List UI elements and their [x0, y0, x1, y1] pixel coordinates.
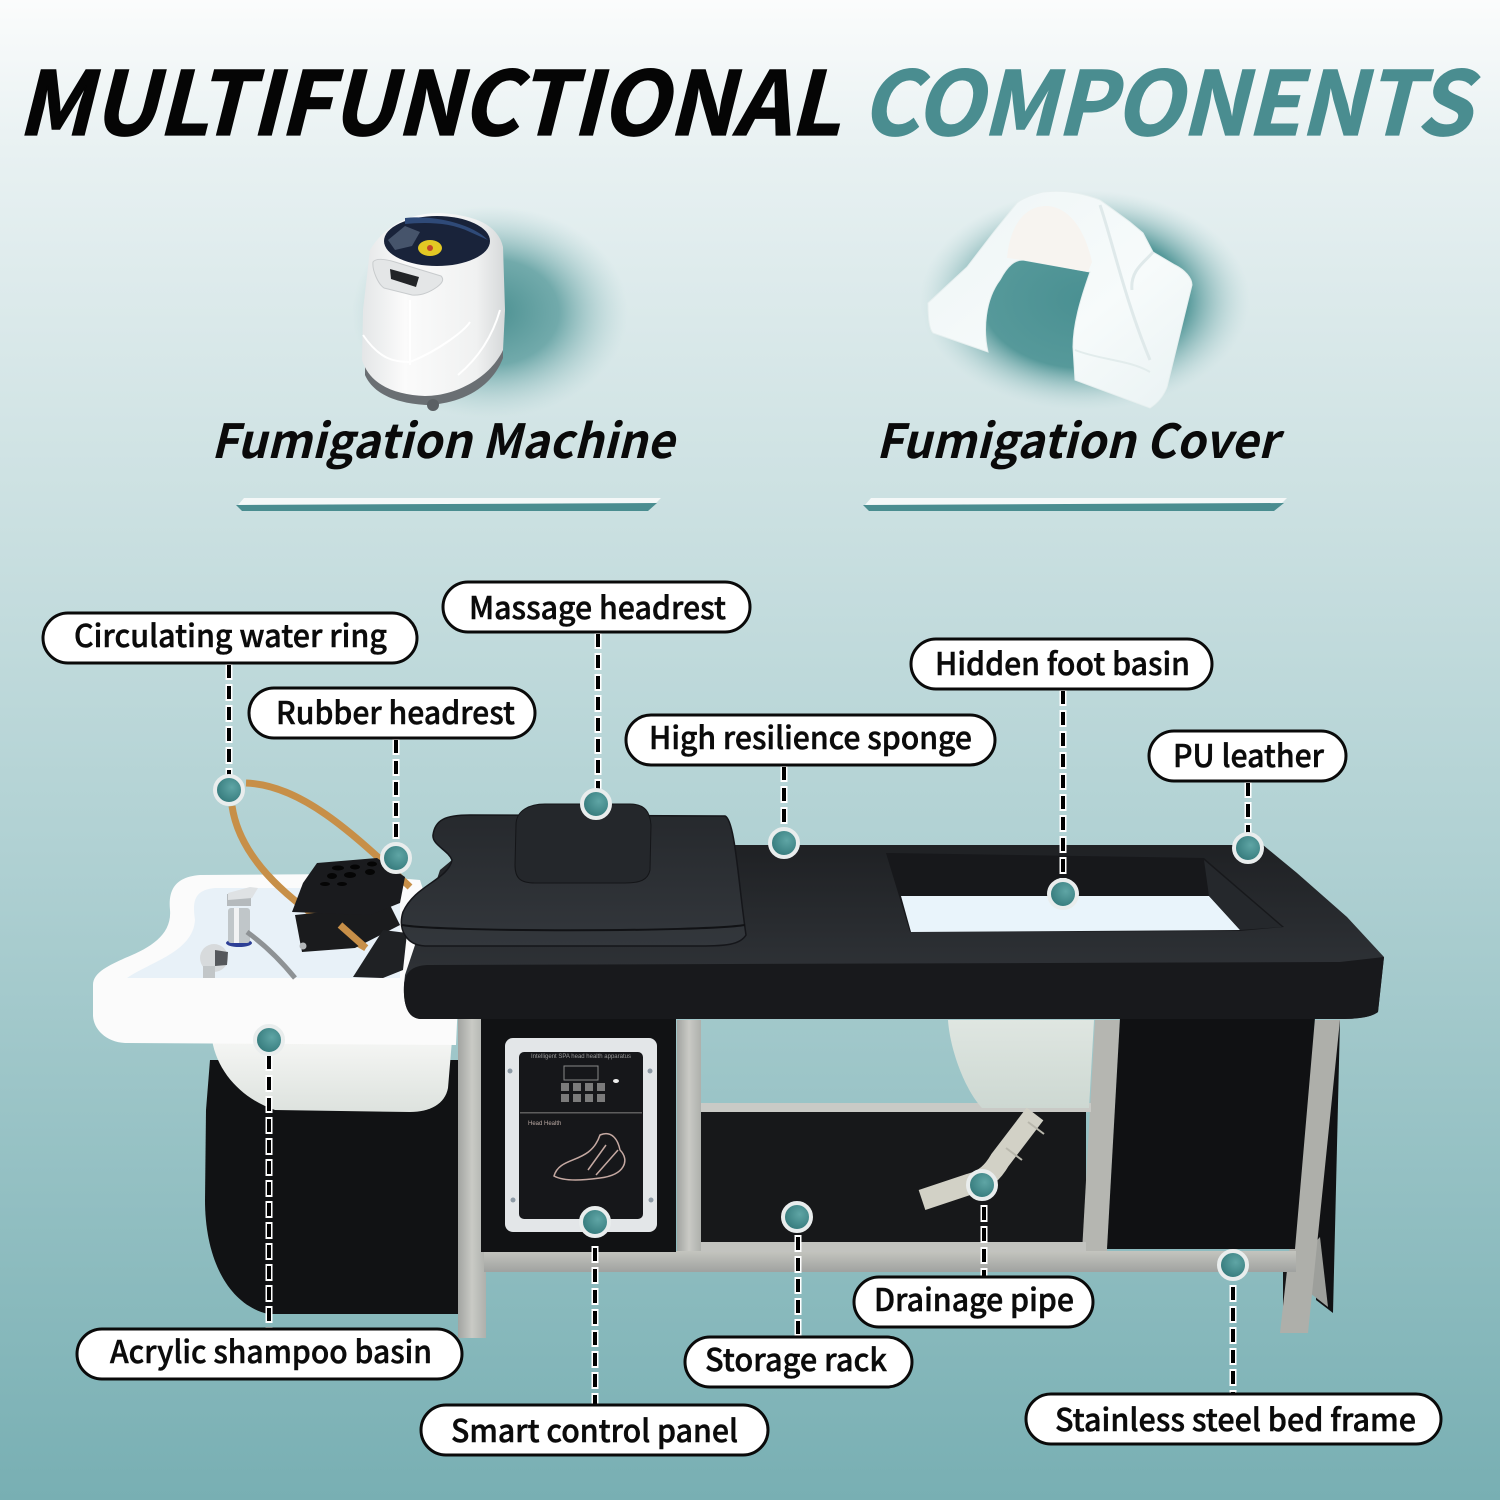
control panel — [505, 1038, 657, 1232]
callout: PU leather — [1149, 731, 1346, 862]
callout: rubber headrest — [249, 688, 535, 872]
underline: fumigation cover — [863, 498, 1287, 511]
control panel: Intelligent SPA head health apparatus — [531, 1054, 631, 1060]
acrylic basin bowl — [212, 1040, 452, 1112]
water ring — [232, 783, 410, 948]
heading: fumigation cover: Fumigation Cover — [876, 403, 1285, 472]
callout: acrylic shampoo basin — [77, 1026, 462, 1379]
icon: fumigation cover — [928, 191, 1192, 408]
callout: circulating water ring — [43, 611, 417, 804]
callout: massage headrest: Massage headrest — [469, 583, 726, 628]
callout: drainage pipe — [854, 1171, 1093, 1327]
panel: fumigation cover — [863, 190, 1287, 511]
callout: hidden foot basin: Hidden foot basin — [935, 639, 1190, 684]
panel: fumigation machine — [211, 206, 678, 511]
massage headrest cushion — [401, 804, 746, 946]
main mattress — [404, 845, 1384, 1019]
icon: steam machine — [362, 213, 505, 411]
acrylic basin top — [93, 874, 458, 1045]
title — [17, 34, 1480, 161]
callout: high resilience sponge: High resilience sponge — [649, 713, 972, 758]
callout: massage headrest — [443, 582, 750, 818]
callout: hidden foot basin — [911, 639, 1212, 908]
foot basin bowl — [948, 1020, 1094, 1108]
callout: smart control panel — [421, 1208, 768, 1455]
callout: acrylic shampoo basin: Acrylic shampoo basin — [110, 1327, 432, 1372]
frame legs and rails — [458, 1018, 1340, 1338]
shampoo basin lower black casing — [205, 1060, 462, 1314]
callout: smart control panel: Smart control panel — [451, 1406, 738, 1451]
black side panels — [481, 1018, 1315, 1252]
control panel: Head Health — [528, 1121, 561, 1127]
drainage pipe — [922, 1114, 1044, 1200]
rubber headrest — [292, 858, 407, 978]
icon: teal glow behind machine — [352, 206, 628, 418]
callout: storage rack — [685, 1203, 912, 1387]
faucet — [200, 887, 295, 978]
title: MULTIFUNCTIONAL — [17, 34, 840, 161]
callout: PU leather: PU leather — [1173, 731, 1324, 776]
shampoo bed illustration — [93, 783, 1384, 1338]
callout: high resilience sponge — [626, 713, 995, 857]
callout: rubber headrest: Rubber headrest — [276, 688, 515, 733]
underline: fumigation machine — [236, 498, 661, 511]
callout: drainage pipe: Drainage pipe — [874, 1275, 1074, 1320]
heading: fumigation machine: Fumigation Machine — [211, 403, 678, 472]
callout: stainless steel bed frame: Stainless steel bed frame — [1055, 1395, 1416, 1440]
callout: storage rack: Storage rack — [705, 1335, 887, 1380]
title: COMPONENTS — [861, 34, 1480, 161]
icon: teal glow behind cover — [920, 190, 1250, 410]
callout: circulating water ring: Circulating water ring — [74, 611, 387, 656]
storage back panel — [700, 1110, 1086, 1244]
foot basin opening — [886, 853, 1284, 932]
callout: stainless steel bed frame — [1026, 1251, 1441, 1444]
